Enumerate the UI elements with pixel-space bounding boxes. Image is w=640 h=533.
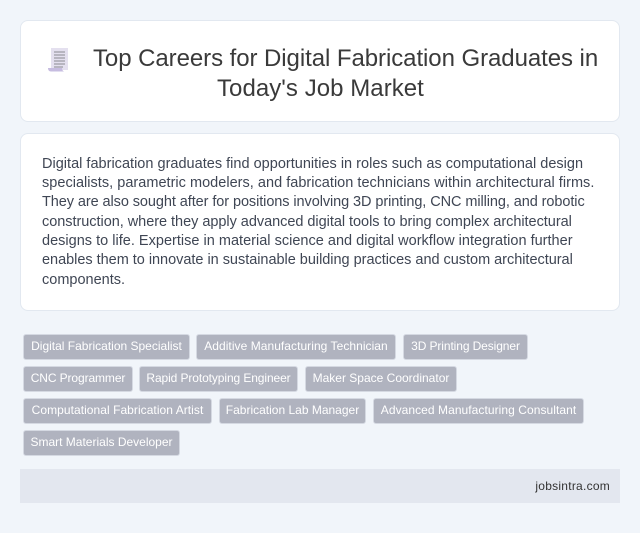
tag: Additive Manufacturing Technician (204, 339, 388, 353)
description text: construction, where they apply advanced digital tools to bring complex architectural (42, 214, 572, 230)
tag: Rapid Prototyping Engineer (146, 371, 291, 385)
footer bar (20, 469, 620, 503)
description text: components. (42, 272, 125, 288)
description text: designs to life. Expertise in material science and digital workflow integration further (42, 233, 573, 249)
description text: specialists, parametric modelers, and fabrication technicians within architectural firms. (42, 175, 594, 191)
description text: enables them to innovate in sustainable building practices and custom architectural (42, 252, 573, 268)
tag (373, 398, 584, 424)
tag (23, 430, 180, 456)
tag (305, 366, 457, 392)
footer source text: jobsintra.com (535, 479, 610, 493)
description text: Digital fabrication graduates find opportunities in roles such as computational design (42, 156, 583, 172)
tag (196, 334, 396, 360)
description panel (20, 133, 620, 311)
tag: Computational Fabrication Artist (32, 403, 203, 417)
title (93, 45, 598, 102)
description text: They are also sought after for positions involving 3D printing, CNC milling, and robotic (42, 194, 585, 210)
tag (139, 366, 298, 392)
header panel (20, 20, 620, 122)
tag (23, 334, 190, 360)
tag: Digital Fabrication Specialist (31, 339, 182, 353)
tag: CNC Programmer (31, 371, 125, 385)
description text (42, 156, 594, 288)
tag: Smart Materials Developer (30, 435, 173, 449)
title: Top Careers for Digital Fabrication Graduates in (93, 45, 598, 72)
tag (23, 366, 133, 392)
tag: Fabrication Lab Manager (226, 403, 359, 417)
tag: Maker Space Coordinator (313, 371, 449, 385)
tag: 3D Printing Designer (411, 339, 520, 353)
title: Today's Job Market (217, 75, 424, 102)
career tags (23, 334, 584, 456)
tag (23, 398, 212, 424)
tag (219, 398, 366, 424)
tag (403, 334, 528, 360)
tag: Advanced Manufacturing Consultant (381, 403, 576, 417)
icon: document scroll (48, 48, 68, 72)
